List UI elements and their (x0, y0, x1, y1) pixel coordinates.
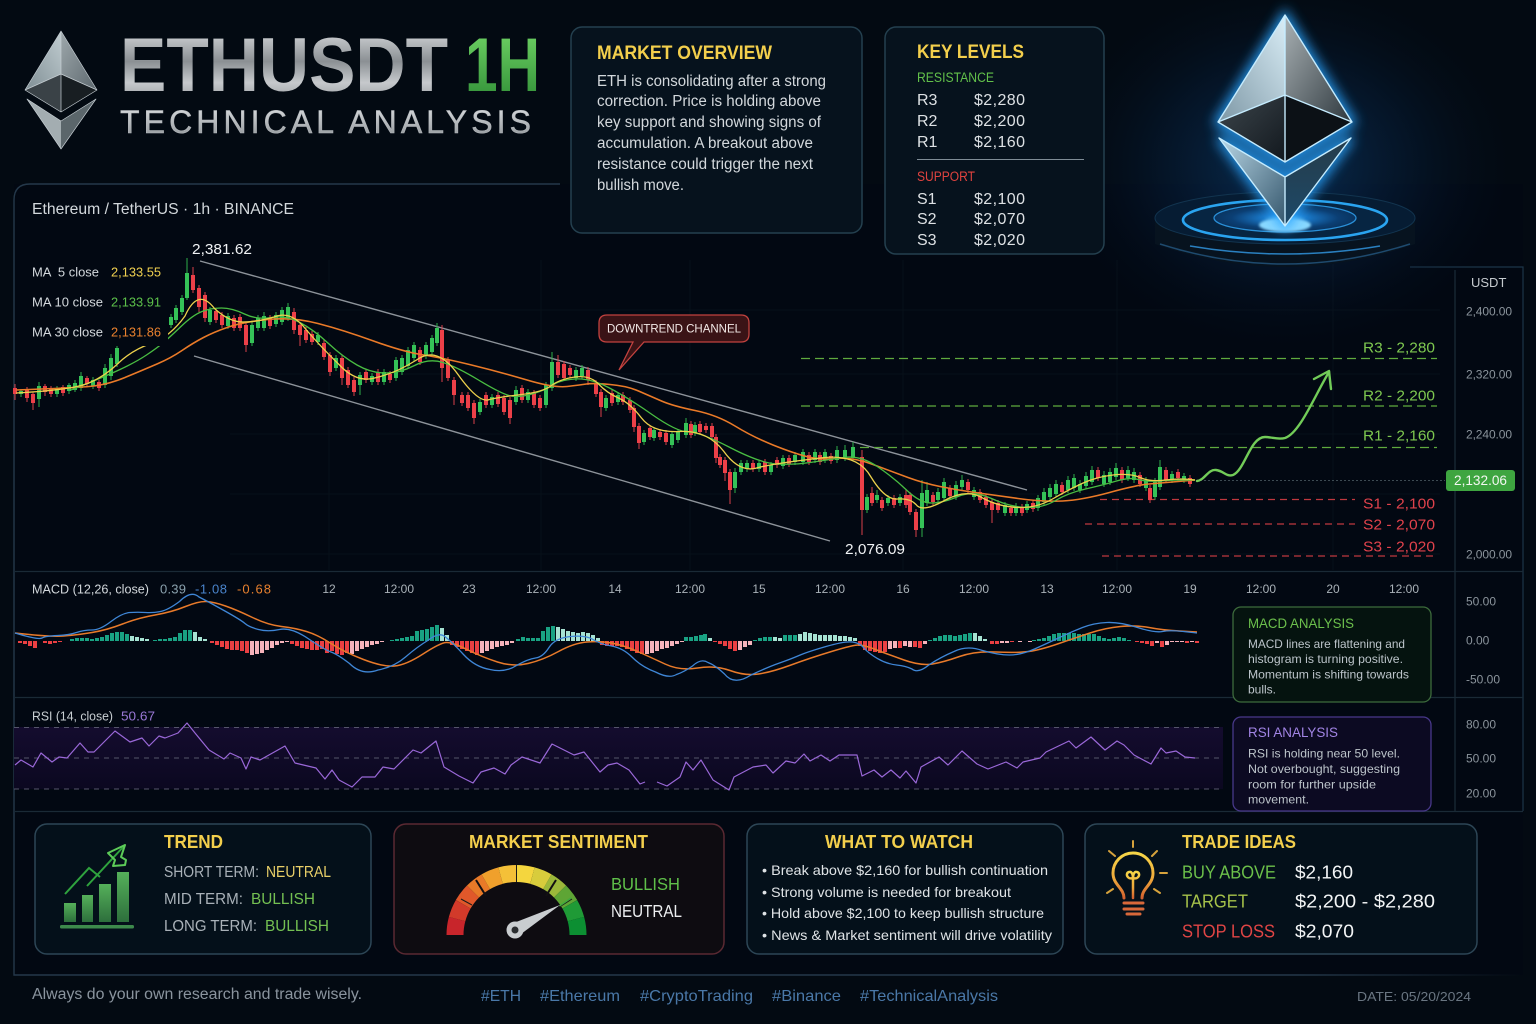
green candle bodies (21, 273, 1184, 528)
trend rows: BULLISH (265, 918, 329, 935)
footer hashtags: #Ethereum (540, 988, 620, 1005)
MA legend: 2,131.86 (111, 326, 161, 340)
MACD axis: 0.00 (1466, 634, 1490, 648)
trend rows (164, 864, 331, 935)
icon: rising bars with arrow (60, 845, 134, 928)
channel lines (194, 261, 1027, 541)
footer hashtags: #Binance (772, 988, 841, 1005)
footer hashtags: #ETH (481, 988, 521, 1005)
resistance list: R1 (917, 134, 938, 151)
RSI axis: 50.00 (1466, 752, 1496, 766)
text: market overview body (597, 73, 826, 194)
panel: market sentiment (394, 824, 724, 954)
trade rows: TARGET (1182, 890, 1248, 912)
text: RSI analysis body: RSI is holding near 50 level. (1248, 746, 1400, 760)
panel: trade ideas (1085, 824, 1477, 954)
MACD axis: 50.00 (1466, 594, 1496, 608)
heading: key levels: KEY LEVELS (917, 42, 1024, 63)
support list: S1 (917, 191, 937, 208)
heading: trend: TREND (164, 832, 223, 852)
icon: ethereum logo (25, 31, 97, 149)
time axis: 12:00 (959, 582, 989, 596)
trend rows: BULLISH (251, 891, 315, 908)
time axis: 13 (1040, 582, 1054, 596)
time axis (322, 582, 1419, 596)
time axis: 12 (322, 582, 336, 596)
support list (917, 169, 1025, 249)
level labels: R3 - 2,280 (1363, 340, 1435, 356)
text: RSI analysis body: room for further upside (1248, 778, 1376, 792)
text: market overview body: resistance could trigger the next (597, 156, 814, 173)
RSI legend: 50.67 (121, 710, 155, 724)
watch list: • News & Market sentiment will drive volatility (762, 927, 1052, 943)
watch list: • Hold above $2,100 to keep bullish structure (762, 905, 1044, 921)
text: MACD analysis body: histogram is turning positive. (1248, 652, 1403, 666)
time axis: 20 (1326, 582, 1340, 596)
panel: chart frame (14, 184, 1523, 975)
projection arrow (1197, 371, 1331, 481)
resistance list: $2,200 (974, 113, 1025, 130)
heading: trade ideas: TRADE IDEAS (1182, 832, 1296, 852)
time axis: 12:00 (815, 582, 845, 596)
trend rows: MID TERM: (164, 891, 243, 908)
icon: glowing ethereum hologram on platform (1155, 15, 1415, 267)
price chart (15, 258, 1445, 556)
panel: trend (35, 824, 371, 954)
support list: $2,020 (974, 232, 1025, 249)
text: MACD analysis body: Momentum is shifting towards (1248, 668, 1409, 682)
text: MACD analysis body (1248, 637, 1409, 696)
time axis: 14 (608, 582, 622, 596)
text: RSI analysis body: movement. (1248, 792, 1309, 806)
MACD axis (1466, 594, 1500, 686)
gauge needle (560, 898, 571, 906)
MACD legend: -1.08 (195, 582, 227, 596)
green candle wicks (21, 258, 1184, 537)
text: MACD analysis body: MACD lines are flattening and (1248, 637, 1405, 651)
MACD legend: MACD (12,26, close) (32, 582, 149, 596)
MA legend: MA 5 close (32, 266, 99, 280)
time axis: 23 (462, 582, 476, 596)
time axis: 12:00 (384, 582, 414, 596)
trend rows: LONG TERM: (164, 918, 257, 935)
text: RSI analysis body (1248, 746, 1400, 806)
resistance list: $2,160 (974, 134, 1025, 151)
time axis: 12:00 (1389, 582, 1419, 596)
resistance list: RESISTANCE (917, 70, 994, 85)
high price label: 2,381.62 (192, 242, 252, 258)
trade rows: BUY ABOVE (1182, 862, 1276, 882)
watch list (762, 862, 1052, 943)
heading: what to watch: WHAT TO WATCH (825, 832, 973, 852)
RSI line (15, 723, 1195, 790)
histogram: pink bars (252, 641, 1192, 655)
footer hashtags: #CryptoTrading (640, 988, 753, 1005)
MACD legend: 0.39 (160, 582, 186, 596)
MACD axis: -50.00 (1466, 672, 1500, 686)
support list: S3 (917, 232, 937, 249)
trade rows: $2,070 (1295, 920, 1354, 942)
price axis: 2,000.00 (1466, 548, 1512, 562)
time axis: 12:00 (526, 582, 556, 596)
text: market overview body: accumulation. A breakout above (597, 135, 813, 152)
red candle bodies (15, 275, 1190, 530)
time axis: 12:00 (1102, 582, 1132, 596)
level labels: R1 - 2,160 (1363, 428, 1435, 444)
level labels: S2 - 2,070 (1363, 516, 1435, 534)
current price tag: 2,132.06 (1454, 473, 1507, 488)
MA legend: 2,133.55 (111, 266, 161, 280)
RSI legend (32, 710, 155, 724)
time axis: 16 (896, 582, 910, 596)
heading: RSI analysis: RSI ANALYSIS (1248, 724, 1338, 740)
MA legend: 2,133.91 (111, 296, 161, 310)
level labels: R2 - 2,200 (1363, 388, 1435, 404)
RSI axis: 20.00 (1466, 786, 1496, 800)
level labels: S1 - 2,100 (1363, 496, 1435, 512)
price axis (1466, 275, 1512, 562)
price axis: 2,400.00 (1466, 304, 1512, 318)
trade rows: STOP LOSS (1182, 920, 1275, 942)
price axis: 2,240.00 (1466, 428, 1512, 442)
RSI chart (14, 723, 1223, 790)
footer hashtags: #TechnicalAnalysis (860, 988, 998, 1005)
title: 1H (465, 23, 540, 108)
signal line (15, 601, 1197, 675)
resistance list: $2,280 (974, 92, 1025, 109)
callout: downtrend channel: DOWNTREND CHANNEL (607, 322, 741, 336)
callout: downtrend channel (599, 315, 749, 370)
icon: light bulb (1107, 841, 1167, 914)
moving average 5 (16, 299, 1195, 508)
text: market overview body: key support and showing signs of (597, 114, 822, 131)
histogram: dark teal bars (72, 625, 1129, 641)
watch list: • Strong volume is needed for breakout (762, 884, 1011, 900)
sentiment labels: BULLISH (611, 874, 680, 894)
price axis: USDT (1471, 275, 1506, 290)
panel: RSI analysis (1233, 717, 1431, 811)
panel: key levels (885, 27, 1104, 254)
panel: MACD analysis (1233, 607, 1431, 702)
RSI band (14, 727, 1223, 789)
resistance list: R3 (917, 92, 938, 109)
title: TECHNICAL ANALYSIS (120, 104, 531, 140)
moving average 10 (71, 308, 1195, 508)
MACD legend: -0.68 (237, 582, 271, 596)
footer disclaimer: Always do your own research and trade wisely. (32, 986, 362, 1003)
panel: market overview (571, 27, 862, 233)
heading: market sentiment: MARKET SENTIMENT (469, 832, 648, 852)
current price tag (1446, 470, 1515, 491)
RSI axis (1466, 718, 1496, 800)
watch list: • Break above $2,160 for bullish continuation (762, 862, 1048, 878)
text: MACD analysis body: bulls. (1248, 682, 1276, 696)
MACD chart (15, 594, 1197, 680)
resistance list (917, 70, 1025, 151)
time axis: 12:00 (675, 582, 705, 596)
red candle wicks (15, 267, 1190, 537)
MA legend: MA 10 close (32, 296, 103, 310)
RSI axis: 80.00 (1466, 718, 1496, 732)
text: RSI analysis body: Not overbought, suggesting (1248, 762, 1400, 776)
histogram: red bars (20, 641, 1197, 655)
panel: market sentiment: NEUTRAL (611, 901, 682, 921)
chart header: Ethereum / TetherUS · 1h · BINANCE (32, 201, 294, 218)
title: ETHUSDT (120, 23, 448, 108)
time axis: 15 (752, 582, 766, 596)
support list: $2,100 (974, 191, 1025, 208)
macd line (15, 594, 1197, 680)
MACD legend (32, 582, 271, 596)
MA legend: MA 30 close (32, 326, 103, 340)
low price label: 2,076.09 (845, 542, 905, 558)
text: market overview body: ETH is consolidating after a strong (597, 73, 826, 90)
RSI legend: RSI (14, close) (32, 710, 113, 724)
panel: what to watch (747, 824, 1063, 954)
resistance dashed lines (801, 358, 1437, 448)
heading: market overview: MARKET OVERVIEW (597, 43, 772, 64)
heading: MACD analysis: MACD ANALYSIS (1248, 615, 1354, 631)
moving average 30 (16, 319, 1195, 501)
MA legend (28, 255, 168, 346)
support dashed lines (1085, 500, 1437, 556)
text: market overview body: correction. Price is holding above (597, 93, 821, 110)
price axis: 2,320.00 (1466, 368, 1512, 382)
gauge (455, 865, 578, 938)
time axis: 12:00 (1246, 582, 1276, 596)
level labels: S3 - 2,020 (1363, 538, 1435, 556)
title (120, 23, 540, 140)
footer hashtags (481, 988, 998, 1005)
support list: SUPPORT (917, 169, 975, 184)
current price line (1200, 480, 1445, 482)
support list: $2,070 (974, 211, 1025, 228)
hero background glow (1055, 0, 1515, 350)
trade rows: $2,160 (1295, 862, 1353, 882)
trend rows: NEUTRAL (266, 864, 331, 881)
trade rows (1182, 862, 1435, 942)
text: market overview body: bullish move. (597, 177, 684, 194)
histogram: light teal bars (132, 627, 985, 641)
time axis: 19 (1183, 582, 1197, 596)
trend rows: SHORT TERM: (164, 864, 259, 881)
support list: S2 (917, 211, 937, 228)
trade rows: $2,200 - $2,280 (1295, 890, 1435, 912)
level labels (1363, 340, 1435, 556)
resistance list: R2 (917, 113, 938, 130)
footer date: DATE: 05/20/2024 (1357, 989, 1471, 1004)
